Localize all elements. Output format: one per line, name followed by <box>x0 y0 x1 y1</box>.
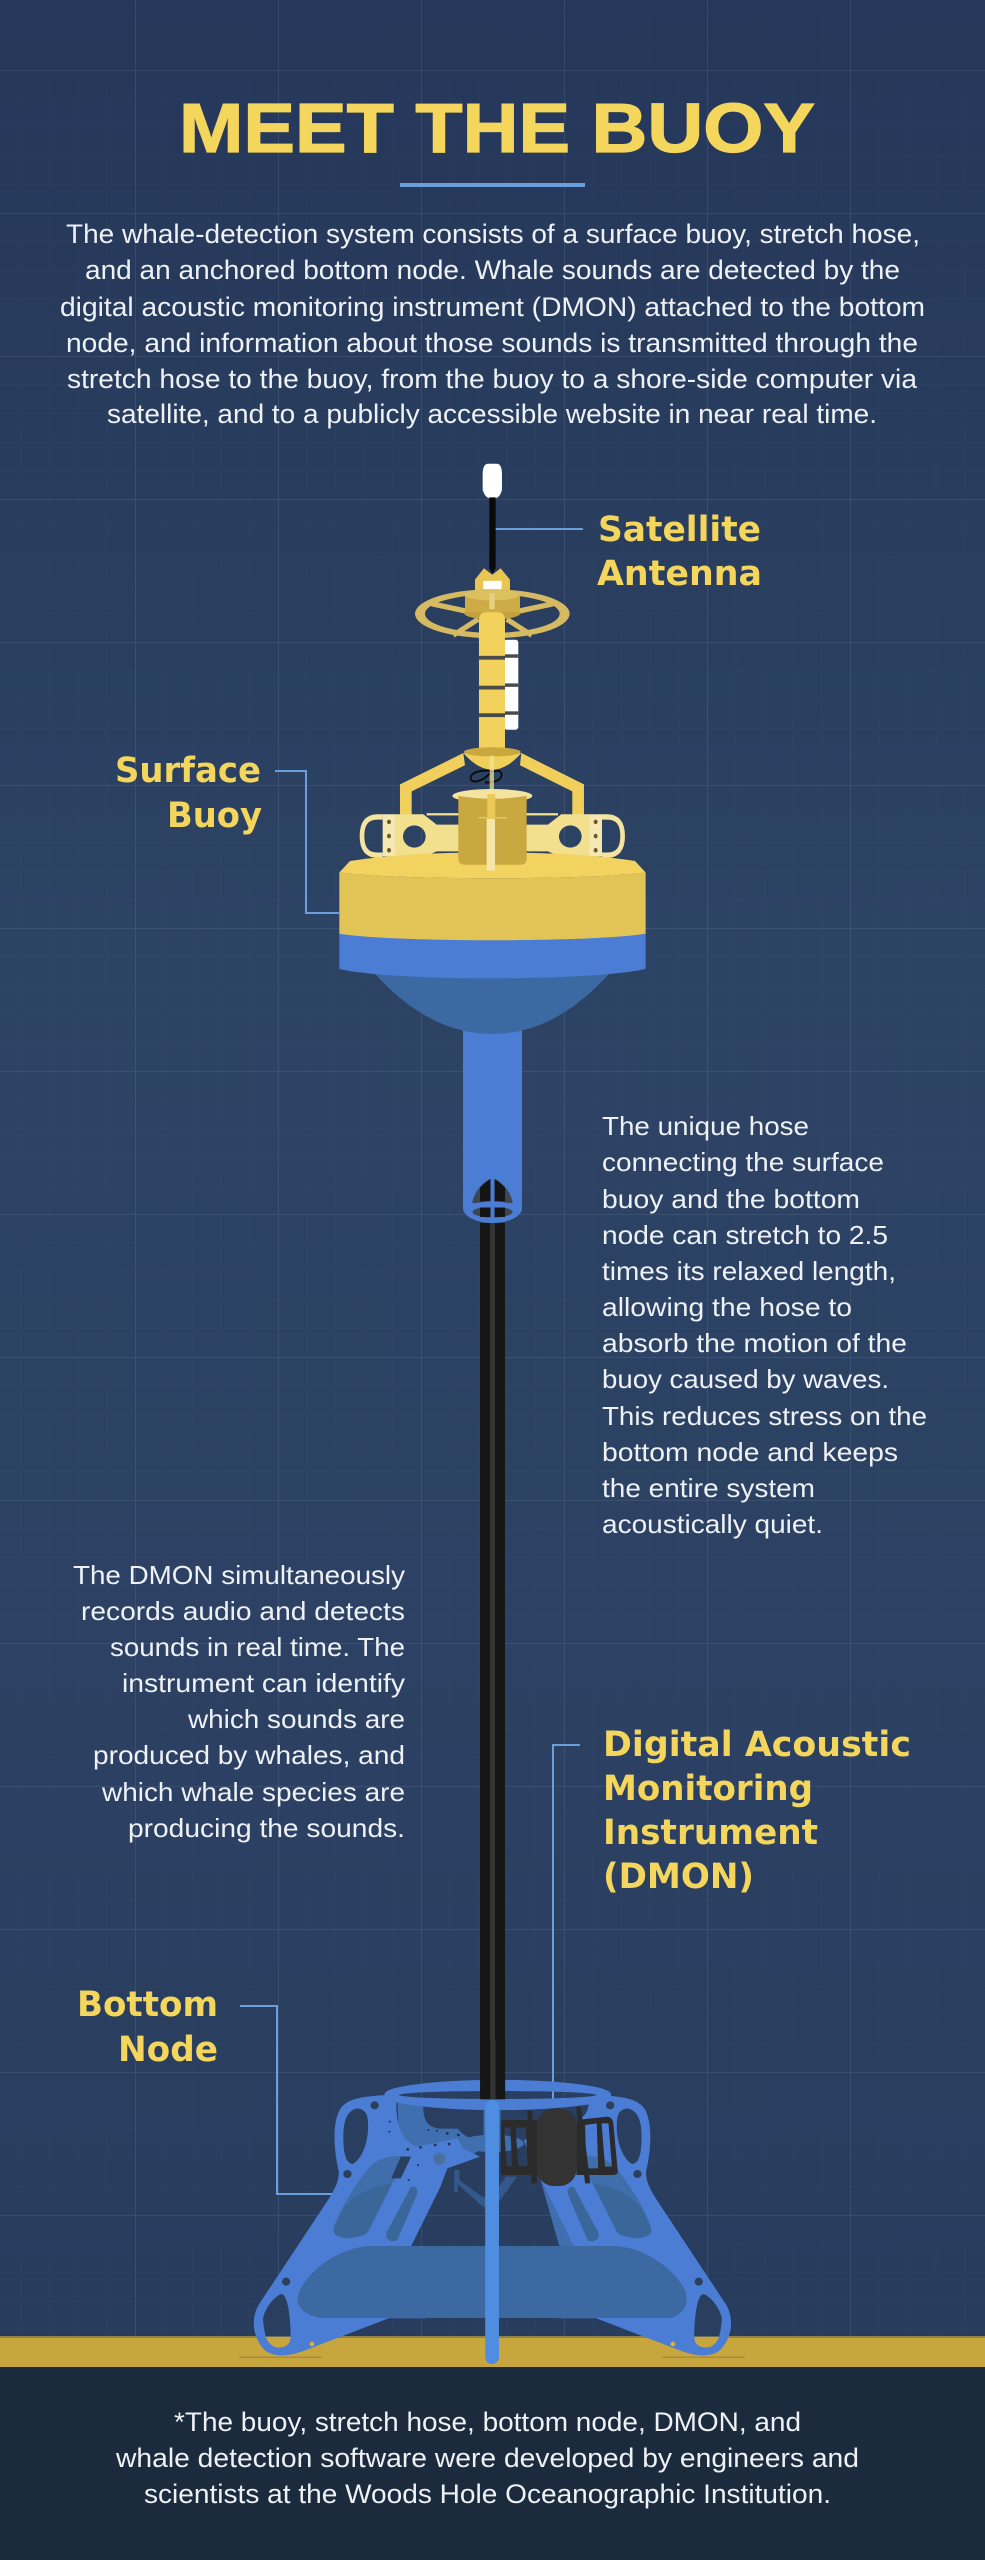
black stretch hose <box>480 1223 505 2103</box>
window crossbars <box>470 1176 515 1218</box>
intro paragraph: The whale-detection system consists of a surface buoy, stretch hose, <box>66 219 920 249</box>
mast <box>479 612 505 752</box>
rear frame <box>392 2102 575 2246</box>
round port <box>433 2153 446 2165</box>
central front leg <box>485 2100 499 2364</box>
coiled wire <box>471 771 502 783</box>
label: surface buoy: Buoy <box>167 796 262 836</box>
bolt holes <box>282 2101 379 2346</box>
right frame panel <box>524 2095 731 2355</box>
label: satellite antenna <box>597 510 762 594</box>
right paragraph: stretch hose: This reduces stress on the <box>602 1401 927 1431</box>
leader line: surface buoy <box>275 771 339 913</box>
title: MEET THE BUOY <box>179 89 815 167</box>
left side bracket <box>362 813 460 857</box>
blue waterline band <box>339 934 646 978</box>
left paragraph: DMON: produced by whales, and <box>93 1740 405 1770</box>
collar <box>463 747 521 790</box>
upper inset <box>333 2156 411 2238</box>
lower sleeve opening <box>472 1206 512 1218</box>
top ring <box>384 2080 611 2110</box>
label: DMON: Digital Acoustic <box>603 1725 911 1765</box>
right paragraph: stretch hose: acoustically quiet. <box>602 1509 823 1539</box>
hose end inside ring <box>480 2040 505 2099</box>
right strap <box>576 2107 590 2183</box>
left paragraph: DMON: records audio and detects <box>81 1596 405 1626</box>
slot <box>391 2157 411 2178</box>
right paragraph: stretch hose: buoy and the bottom <box>602 1184 860 1214</box>
label: bottom node: Node <box>118 2030 218 2070</box>
footer note: *The buoy, stretch hose, bottom node, DMON, and <box>174 2407 801 2437</box>
leader line: DMON <box>553 1745 580 2108</box>
right paragraph: stretch hose: absorb the motion of the <box>602 1328 907 1358</box>
support arms <box>400 753 584 815</box>
surface buoy illustration <box>339 464 646 1034</box>
buoy body <box>339 872 646 941</box>
footer note <box>115 2407 859 2509</box>
label: DMON: (DMON) <box>603 1857 754 1897</box>
bottom plate <box>297 2246 687 2318</box>
footer note: whale detection software were developed by engineers and <box>115 2443 859 2473</box>
rivets <box>388 2121 460 2181</box>
centre cup <box>452 789 532 871</box>
left cage <box>501 2120 539 2175</box>
blue sleeve <box>463 1005 522 1223</box>
central body <box>537 2108 576 2186</box>
antenna tip <box>483 464 502 498</box>
lower hole <box>263 2294 291 2337</box>
hull <box>372 970 613 1034</box>
label: satellite antenna: Antenna <box>597 554 762 594</box>
lower hole over sand <box>266 2337 291 2348</box>
long slot <box>386 2187 417 2241</box>
sleeve window <box>472 1178 513 1204</box>
right paragraph: stretch hose: connecting the surface <box>602 1147 884 1177</box>
DMON instrument <box>501 2107 618 2186</box>
bottom node illustration <box>254 2040 731 2364</box>
label: DMON: Monitoring <box>603 1769 813 1809</box>
intro paragraph: digital acoustic monitoring instrument (DMON) attached to the bottom <box>60 292 925 322</box>
label: bottom node: Bottom <box>77 1985 218 2025</box>
right cage <box>576 2117 618 2175</box>
left paragraph: DMON: The DMON simultaneously <box>73 1560 405 1590</box>
intro paragraph: and an anchored bottom node. Whale sounds are detected by the <box>85 255 900 285</box>
right paragraph: stretch hose: times its relaxed length, <box>602 1256 896 1286</box>
intro paragraph: satellite, and to a publicly accessible website in near real time. <box>107 399 877 429</box>
right paragraph: stretch hose: buoy caused by waves. <box>602 1364 889 1394</box>
stretch hose upper sleeve <box>463 1005 522 1223</box>
intro paragraph: node, and information about those sounds is transmitted through the <box>66 328 918 358</box>
intro paragraph <box>60 219 925 429</box>
antenna stem <box>489 497 496 574</box>
sandy seabed <box>0 2336 985 2367</box>
left paragraph: DMON <box>73 1560 405 1843</box>
intro paragraph: stretch hose to the buoy, from the buoy to a shore-side computer via <box>67 364 917 394</box>
footer note: scientists at the Woods Hole Oceanographic Institution. <box>144 2479 831 2509</box>
right paragraph: stretch hose: bottom node and keeps <box>602 1437 898 1467</box>
label: DMON: Instrument <box>603 1813 818 1853</box>
right paragraph: stretch hose: node can stretch to 2.5 <box>602 1220 888 1250</box>
label: DMON <box>603 1725 911 1897</box>
right paragraph: stretch hose: The unique hose <box>602 1111 809 1141</box>
right paragraph: stretch hose: allowing the hose to <box>602 1292 852 1322</box>
leader line: bottom node <box>240 2006 335 2194</box>
lower inset shade <box>333 2183 392 2238</box>
label: bottom node <box>77 1985 218 2070</box>
battery pack <box>504 640 518 730</box>
left frame panel <box>254 2095 480 2355</box>
footer panel <box>0 2367 985 2560</box>
left paragraph: DMON: which whale species are <box>101 1777 405 1807</box>
right side bracket <box>525 813 623 857</box>
buoy top face <box>339 853 646 878</box>
label: satellite antenna: Satellite <box>598 510 761 550</box>
left paragraph: DMON: which sounds are <box>187 1704 405 1734</box>
hose seen through window <box>480 1178 505 1217</box>
leader line: satellite antenna <box>495 528 583 530</box>
antenna crown <box>475 568 510 590</box>
left paragraph: DMON: producing the sounds. <box>128 1813 405 1843</box>
left strap <box>527 2111 537 2183</box>
wheel hub <box>464 590 521 619</box>
right paragraph: stretch hose <box>602 1111 927 1539</box>
label: surface buoy: Surface <box>115 751 261 791</box>
title underline <box>400 183 585 187</box>
left paragraph: DMON: sounds in real time. The <box>110 1632 405 1662</box>
label: surface buoy <box>115 751 262 836</box>
left paragraph: DMON: instrument can identify <box>122 1668 405 1698</box>
right paragraph: stretch hose: the entire system <box>602 1473 815 1503</box>
wheel ring with spokes <box>415 589 570 638</box>
upper hole <box>343 2108 368 2164</box>
